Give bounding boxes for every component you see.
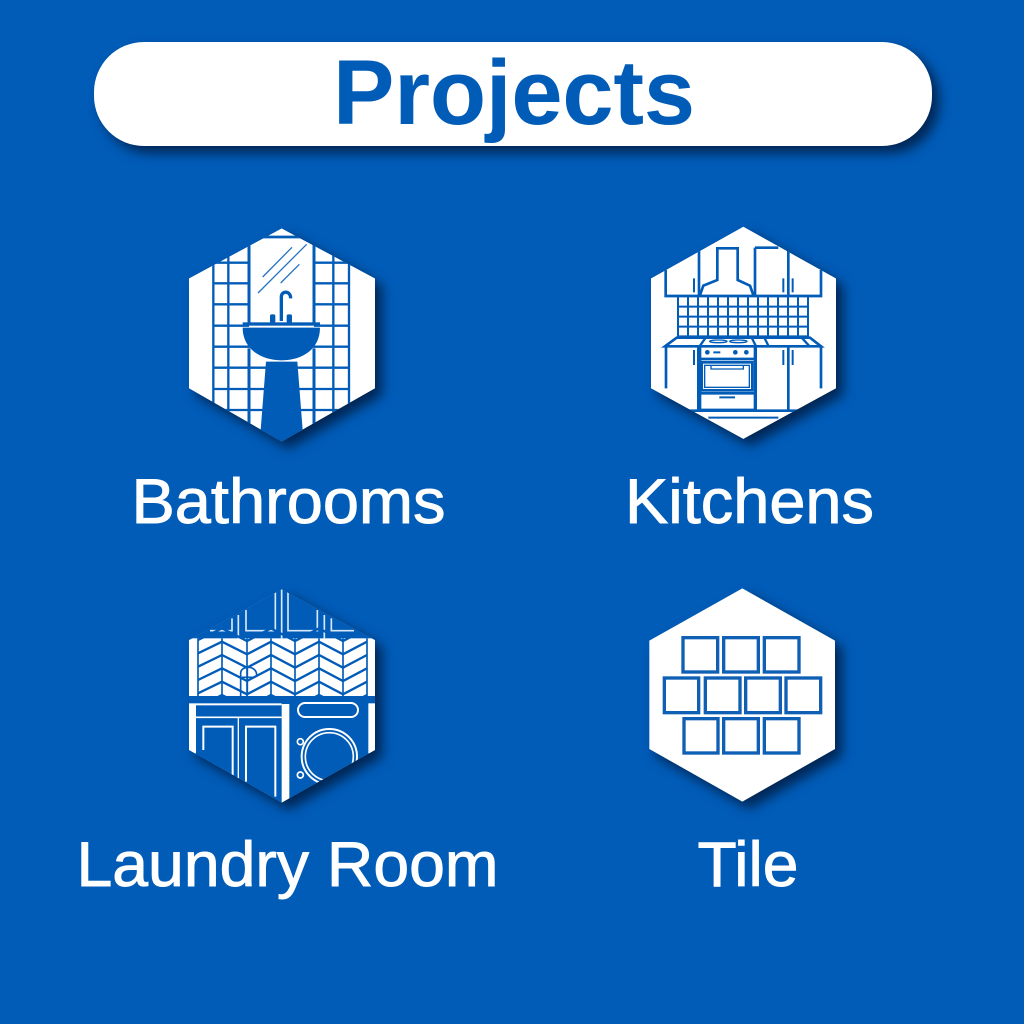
oven — [702, 362, 752, 390]
icon: laundry room — [183, 587, 383, 809]
title pill — [94, 42, 932, 146]
cabinet and washer area — [189, 696, 375, 802]
title banner — [94, 42, 932, 146]
icon: tile — [649, 588, 835, 802]
pedestal — [261, 362, 303, 445]
panel: tile — [649, 588, 835, 900]
panel: kitchens — [625, 227, 874, 537]
herringbone tile — [197, 627, 368, 696]
label: laundry room: Laundry Room — [76, 830, 498, 900]
base cabinets — [666, 346, 821, 412]
backsplash — [678, 297, 808, 337]
upper cabinets — [192, 590, 372, 638]
upper cabinets — [666, 248, 821, 296]
panel: laundry room — [76, 587, 498, 900]
panel: bathrooms — [132, 228, 445, 537]
faucet — [281, 292, 291, 321]
icon: bathroom sink — [189, 228, 375, 445]
label: bathrooms: Bathrooms — [132, 467, 445, 537]
icon: kitchen — [651, 227, 836, 439]
label: kitchens: Kitchens — [625, 467, 874, 537]
floor — [689, 409, 798, 412]
title: Projects — [333, 42, 695, 144]
label: tile: Tile — [698, 830, 798, 900]
countertop — [665, 338, 821, 346]
sink basin — [243, 328, 320, 360]
